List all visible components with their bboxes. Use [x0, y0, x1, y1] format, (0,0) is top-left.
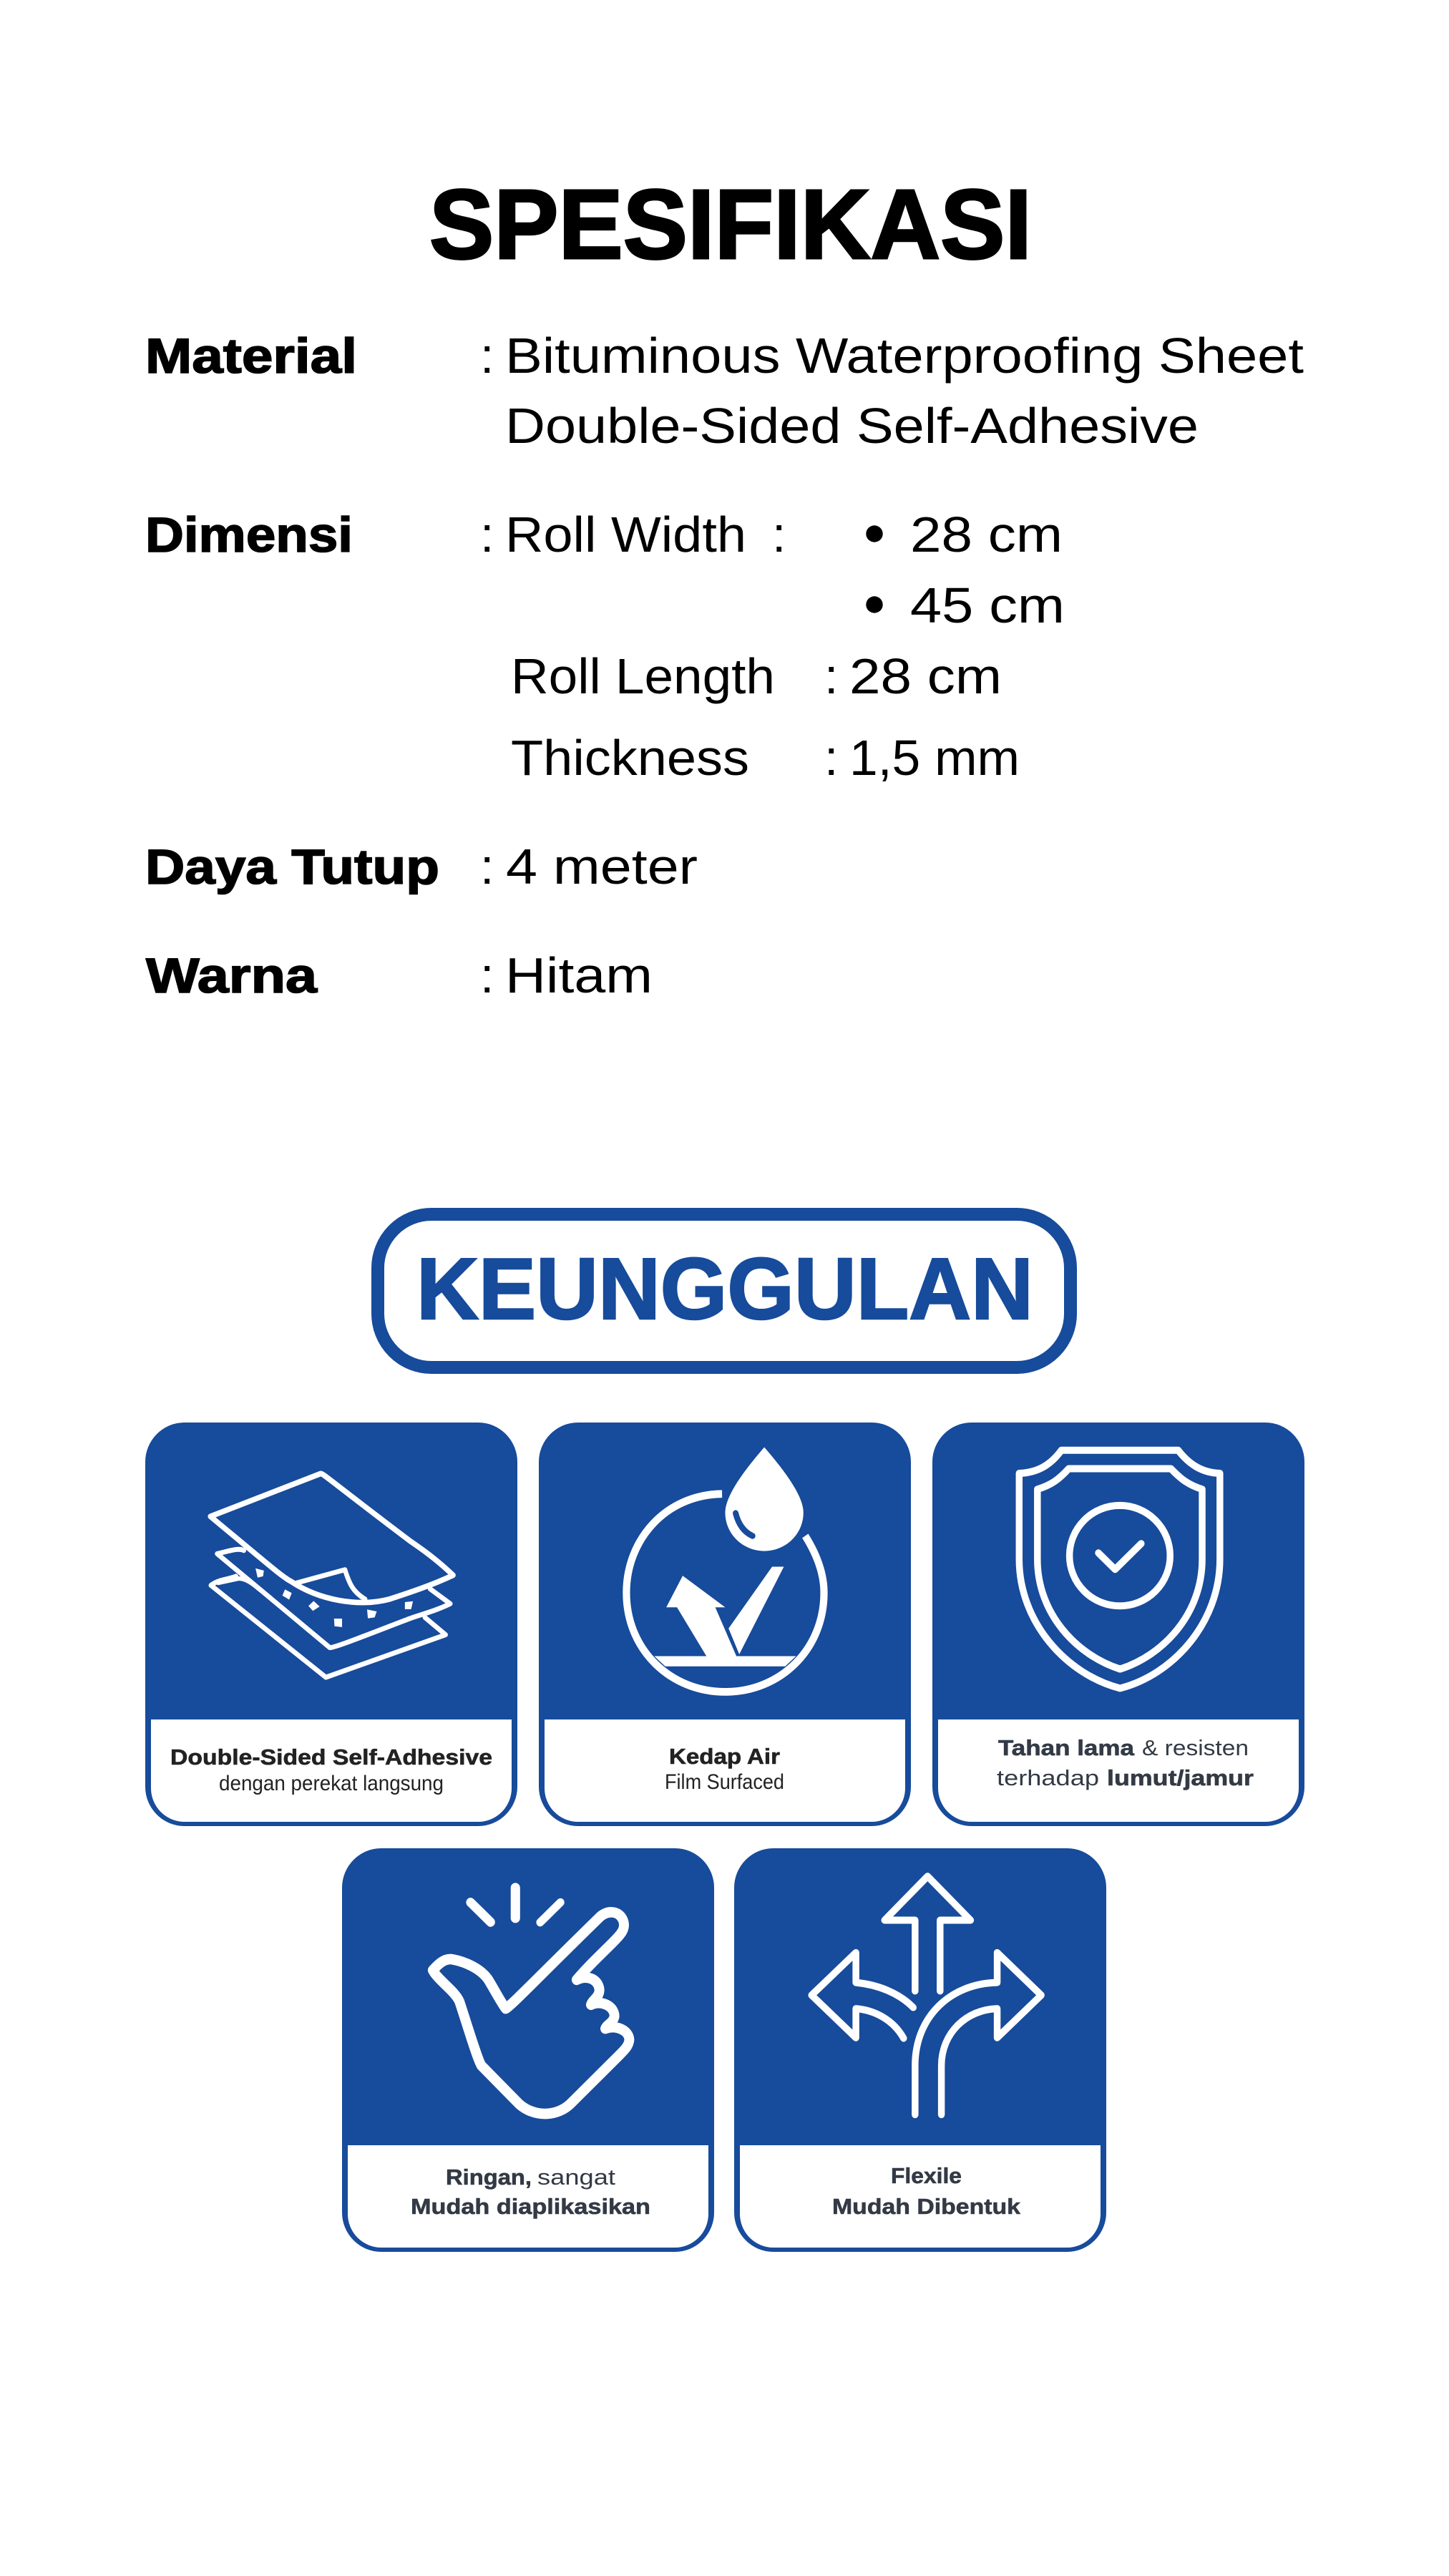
label: Tahan lama dan resisten: lumut/jamur — [1107, 1765, 1254, 1790]
icon: adhesive sheets — [210, 1473, 453, 1677]
spec row: Daya Tutup: Daya Tutup — [145, 839, 439, 894]
label: Double-Sided Self-Adhesive: dengan perekat langsung — [219, 1772, 444, 1795]
spec row: Warna — [146, 947, 653, 1003]
spec row: Material: Double-Sided Self-Adhesive — [505, 398, 1199, 454]
panel: specification list — [145, 328, 1304, 1003]
label: Ringan, sangat Mudah diaplikasikan: sangat — [537, 2165, 615, 2190]
icon: water drop with circle and arrow check — [626, 1448, 824, 1692]
label: Double-Sided Self-Adhesive — [170, 1745, 492, 1795]
spec row: Material: Material — [145, 328, 357, 384]
card: Flexile — [734, 1848, 1106, 2252]
spec row: Material: Bituminous Waterproofing Sheet — [505, 328, 1304, 384]
label: Tahan lama dan resisten — [997, 1735, 1254, 1790]
spec row: Dimensi: Thickness — [511, 730, 749, 786]
label: Flexile Mudah Dibentuk: Mudah Dibentuk — [832, 2194, 1021, 2219]
spec row: Dimensi: Roll Length — [511, 648, 775, 704]
spec row: Dimensi: 45 cm — [910, 577, 1065, 633]
spec row: Dimensi: : — [824, 648, 838, 704]
label: Ringan, sangat Mudah diaplikasikan: Mudah diaplikasikan — [411, 2194, 650, 2219]
spec row: Dimensi: 28 cm — [849, 648, 1002, 704]
icon: three-way arrows — [811, 1876, 1041, 2114]
card: Kedap Air — [539, 1423, 911, 1826]
spec row: Dimensi — [145, 507, 1065, 786]
label: Tahan lama dan resisten: & resisten — [1142, 1735, 1249, 1760]
spec row: Dimensi: : — [824, 730, 838, 786]
spec row: Material: : — [480, 328, 494, 384]
spec row: Warna: : — [480, 947, 494, 1003]
label: Ringan, sangat Mudah diaplikasikan: Ringan, — [446, 2165, 532, 2190]
label: Flexile Mudah Dibentuk: Flexile — [891, 2163, 962, 2188]
spec row: Daya Tutup — [145, 839, 698, 894]
card: Double-Sided Self-Adhesive — [145, 1423, 517, 1826]
heading: KEUNGGULAN pill: KEUNGGULAN — [416, 1240, 1033, 1337]
spec row: Warna: Hitam — [505, 947, 653, 1003]
heading: KEUNGGULAN pill — [378, 1214, 1070, 1367]
spec row: Daya Tutup: 4 meter — [506, 839, 698, 894]
label: Kedap Air: Kedap Air — [669, 1744, 780, 1769]
label: Tahan lama dan resisten: Tahan lama — [998, 1735, 1135, 1760]
spec row: Daya Tutup: : — [480, 839, 494, 894]
label: Flexile Mudah Dibentuk — [832, 2163, 1021, 2219]
spec row: Dimensi: 1,5 mm — [849, 730, 1020, 786]
spec row: Dimensi: Roll Width — [505, 507, 746, 562]
label: Kedap Air: Film Surfaced — [665, 1770, 784, 1794]
card: Ringan — [342, 1848, 714, 2252]
spec row: Dimensi: : — [772, 507, 786, 562]
spec row: Dimensi: Dimensi — [145, 507, 353, 562]
label: Ringan, sangat Mudah diaplikasikan — [411, 2165, 650, 2219]
card: Tahan lama — [932, 1423, 1304, 1826]
spec row: Dimensi: : — [480, 507, 494, 562]
title: SPESIFIKASI: SPESIFIKASI — [429, 170, 1032, 280]
spec row: Material — [145, 328, 1304, 454]
icon: shield with check — [1019, 1450, 1220, 1688]
label: Tahan lama dan resisten: terhadap — [997, 1765, 1099, 1790]
icon: finger snap hand — [433, 1888, 629, 2114]
spec row: Warna: Warna — [146, 948, 318, 1003]
label: Kedap Air — [665, 1744, 784, 1794]
spec row: Dimensi: 28 cm — [910, 507, 1063, 562]
label: Double-Sided Self-Adhesive: Double-Sided Self-Adhesive — [170, 1745, 492, 1770]
